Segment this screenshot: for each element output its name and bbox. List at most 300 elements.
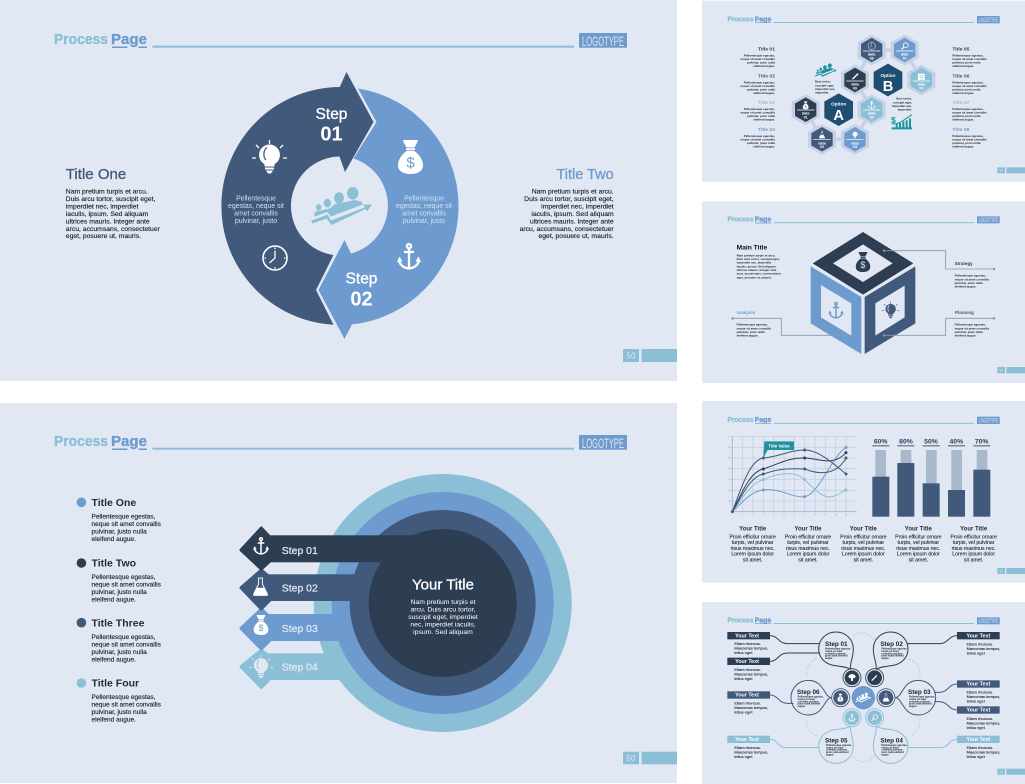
list: title two: Title Two xyxy=(92,558,136,570)
text column: titles 05 to 08: neque sit amet convallis xyxy=(952,84,987,88)
petal: step 01: justo nulla eleifend xyxy=(824,655,848,658)
list: title one: neque sit amet convallis xyxy=(92,521,162,528)
banner: right second: Your Text xyxy=(966,682,990,688)
logotype box: LOGOTYPE xyxy=(979,418,998,425)
panel: charts slide xyxy=(702,401,1025,583)
bar: 70%: 70% xyxy=(975,438,988,445)
list: title three: Title Three xyxy=(92,617,145,629)
petal: step 02 xyxy=(873,632,908,669)
text block: planning: pulvinar, justo nulla xyxy=(955,330,983,334)
list: title four xyxy=(77,678,162,724)
text block: title one: Title One xyxy=(66,166,126,183)
banner: left third: Maecenas tempus, xyxy=(734,705,768,710)
text column: titles 01 to 04: eleifend augue. xyxy=(753,144,775,148)
bar: 60%: 60% xyxy=(874,438,888,445)
text block: planning: eleifend augue. xyxy=(955,334,977,338)
heading: Process Page: Process xyxy=(727,617,753,624)
text column: titles 05 to 08: pulvinar, justo nulla xyxy=(952,61,981,65)
text: your title xyxy=(408,576,478,636)
banner: right bottom: tellus eget xyxy=(967,754,986,759)
panel: six-step petal slide xyxy=(702,602,1025,784)
text column 1: Lorem ipsum dolor xyxy=(731,552,774,558)
petal: step 01: augue. xyxy=(825,657,833,660)
text block: title one: iaculis, ipsum. Sed aliquam xyxy=(66,211,148,218)
callout: title value: Title Value xyxy=(768,443,790,448)
icon: clock xyxy=(263,246,287,270)
text column: titles 01 to 04: Title 02 xyxy=(758,74,775,80)
list: title two: Pellentesque egestas, xyxy=(92,574,155,581)
logotype box xyxy=(579,33,627,49)
list: title two: neque sit amet convallis xyxy=(92,582,162,588)
text column 2: sit amet. xyxy=(798,557,818,563)
label: step 01 xyxy=(316,106,347,146)
axis labels: 3 xyxy=(729,479,731,481)
banner: right bottom: Maecenas tempus, xyxy=(967,749,1000,754)
label: step 02: Step xyxy=(346,270,377,288)
text column 5: Lorem ipsum dolor xyxy=(952,552,995,558)
banner: left top: tellus eget xyxy=(734,650,753,655)
banner: right third: Etiam rhoncus. xyxy=(967,716,993,721)
text column: titles 05 to 08: pulvinar, justo nulla xyxy=(952,141,981,145)
node: data 08 xyxy=(858,35,886,65)
text column 4: sit amet. xyxy=(909,557,928,563)
label: step 01: 01 xyxy=(320,124,343,146)
series: slate top xyxy=(731,448,847,513)
list: title four: Pellentesque egestas, xyxy=(92,694,155,701)
list: title one xyxy=(77,497,162,543)
heading: Process Page: Process xyxy=(727,16,753,23)
node: data 07 xyxy=(891,35,919,65)
node: data 02 xyxy=(808,124,836,155)
text column: titles 01 to 04: Pellentesque egestas, xyxy=(744,81,775,85)
logotype box: LOGOTYPE xyxy=(582,435,624,451)
text column 4 xyxy=(895,526,942,563)
petal: step 04: Pellentesque egestas, xyxy=(881,744,907,747)
node: option A xyxy=(824,93,853,126)
petal: step 04: augue. xyxy=(881,753,890,756)
text: your title: ipsum. Sed aliquam xyxy=(413,629,473,636)
axis labels: 7 xyxy=(804,514,806,516)
text column: titles 01 to 04: Pellentesque egestas, xyxy=(744,134,775,138)
banner: right second: tellus eget xyxy=(967,698,986,703)
text block: title two: iaculis, ipsum. Sed aliquam xyxy=(531,211,614,218)
axis labels: 8 xyxy=(814,514,816,516)
text: left segment copy: Pellentesque xyxy=(236,196,276,202)
text: left hexagon note: imperdiet nec, xyxy=(815,87,835,91)
text column 2: turpis, vel pulvinar xyxy=(787,540,829,546)
banner: left bottom: Maecenas tempus, xyxy=(734,749,768,754)
banner: right top: tellus eget xyxy=(967,651,986,656)
text column: titles 01 to 04: eleifend augue. xyxy=(753,64,775,68)
petal: step 05: augue. xyxy=(826,753,834,756)
text: your title: Your Title xyxy=(412,576,474,594)
axis labels: 3 xyxy=(763,514,765,516)
text block: title one: eget, posuere ut, mauris. xyxy=(66,233,141,240)
text block: main title: arcu, accumsans, consectetuer xyxy=(737,272,782,276)
tab: step 02: Step 02 xyxy=(282,584,318,594)
text column: titles 01 to 04: neque sit amet convallis xyxy=(740,137,775,141)
text block: title two: eget, posuere ut, mauris. xyxy=(539,233,614,240)
banner: left bottom xyxy=(727,736,770,759)
petal: step 05: Step 05 xyxy=(825,738,848,745)
text block: analysis xyxy=(737,310,772,338)
text block: planning: Pellentesque egestas, xyxy=(955,323,986,327)
banner: right top xyxy=(957,632,1000,656)
text block: title two: Nam pretium turpis et arcu. xyxy=(532,188,614,196)
text column: titles 05 to 08: Pellentesque egestas, xyxy=(952,107,984,111)
petal: step 02: Pellentesque egestas, xyxy=(881,648,907,651)
line chart xyxy=(728,437,857,516)
logotype box: LOGOTYPE xyxy=(979,618,998,625)
node: data 02: 02 xyxy=(820,145,824,149)
label: step 02: 02 xyxy=(350,288,373,310)
list: title three: Pellentesque egestas, xyxy=(92,634,155,641)
text block: analysis: eleifend augue. xyxy=(737,334,759,338)
heading: Process Page xyxy=(727,417,771,424)
node: option B: Option xyxy=(880,73,896,78)
axis labels: 10 xyxy=(834,514,838,516)
text column: titles 05 to 08: Title 07 xyxy=(952,100,970,106)
text column 3: sit amet. xyxy=(854,557,873,563)
text column 5: Your Title xyxy=(960,526,988,532)
text block: title two: Title Two xyxy=(556,167,614,183)
text block: analysis: Analysis xyxy=(737,310,756,315)
text: left hexagon note: imperdiet. xyxy=(815,91,829,95)
petal: step 04 xyxy=(873,726,908,763)
hub icon: step 04 xyxy=(866,709,884,727)
list: title one: pulvinar, justo nulla xyxy=(92,528,147,536)
text block: main title: eget, posuere ut, mauris. xyxy=(737,275,772,279)
banner: right third: tellus eget xyxy=(967,725,986,730)
text column 5: Proin efficitur ornare xyxy=(950,534,997,540)
ring: blue xyxy=(332,492,554,714)
logotype box: LOGOTYPE xyxy=(979,17,998,24)
list: title one: Pellentesque egestas, xyxy=(92,514,155,520)
list: title two: pulvinar, justo nulla xyxy=(92,589,147,596)
text column 1: Proin efficitur ornare xyxy=(729,534,776,540)
banner: right second xyxy=(957,680,1000,703)
page number: 50 xyxy=(999,368,1003,372)
text block: main title xyxy=(737,245,782,279)
text block: title two: ultrices mauris. Integer ante xyxy=(530,218,614,225)
hub icon: step 05 xyxy=(843,709,861,727)
connector lines xyxy=(770,636,957,748)
text: right segment copy: pulvinar, justo xyxy=(403,218,445,225)
banner: left second: Your Text xyxy=(735,659,759,665)
text column: titles 05 to 08: Title 05 xyxy=(952,47,970,53)
banner: left top: Etiam rhoncus. xyxy=(734,641,761,646)
icon: teal growth chart xyxy=(891,115,912,128)
list: title three xyxy=(77,617,162,663)
text block: strategy: neque sit amet convallis xyxy=(955,277,990,281)
text column: titles 01 to 04: neque sit amet convallis xyxy=(740,57,775,61)
node: data 09: 09 xyxy=(853,86,857,90)
axis labels: 4 xyxy=(773,514,775,516)
text column 3 xyxy=(840,526,887,563)
text: right hexagon note: imperdiet nec, xyxy=(892,104,912,108)
text column 2: risus maximus nec. xyxy=(786,546,830,552)
text block: main title: Nam pretium turpis et arcu. xyxy=(737,253,775,257)
banner: left third: Etiam rhoncus. xyxy=(734,701,761,706)
node: data 01: data xyxy=(802,112,809,116)
cube diagram xyxy=(811,232,915,354)
heading: Process Page xyxy=(727,617,771,624)
text column: titles 01 to 04: pulvinar, justo nulla xyxy=(747,141,775,145)
node: data 04: data xyxy=(868,112,875,116)
node: data 07: 07 xyxy=(903,56,907,60)
petal: step 05: Pellentesque egestas, xyxy=(826,744,852,747)
text column: titles 01 to 04 xyxy=(740,47,775,148)
list: title one: eleifend augue. xyxy=(92,536,136,543)
text block: strategy: Strategy xyxy=(955,261,973,266)
text column 4: turpis, vel pulvinar xyxy=(898,540,939,546)
text column: titles 05 to 08: neque sit amet convallis xyxy=(952,57,987,61)
axis labels: 4 xyxy=(729,469,731,471)
text: left hexagon note: suscipit eget, xyxy=(815,83,834,87)
axis labels: 6 xyxy=(729,447,731,449)
text column 1: sit amet. xyxy=(743,557,762,563)
text column: titles 01 to 04: neque sit amet convallis xyxy=(740,110,775,114)
axis labels: 6 xyxy=(794,514,796,516)
text: right hexagon note: suscipit eget, xyxy=(893,100,912,104)
banner: right top: Etiam rhoncus. xyxy=(967,642,993,647)
icon: money bag xyxy=(398,140,423,174)
text block: analysis: neque sit amet convallis xyxy=(737,326,772,330)
petal: step 06: Pellentesque egestas, xyxy=(798,696,824,699)
list: title four: neque sit amet convallis xyxy=(92,702,162,708)
axis labels: 5 xyxy=(783,514,785,516)
petal: step 01: neque sit amet xyxy=(825,650,843,653)
text: your title: nec, imperdiet iaculis, xyxy=(410,622,476,628)
tab: step 04: Step 04 xyxy=(282,662,318,674)
petal: step 04: convallis pulvinar, xyxy=(881,749,903,752)
text: right segment copy: egestas, neque sit xyxy=(396,203,452,210)
petal: step 03 xyxy=(895,680,936,715)
list: title four: pulvinar, justo nulla xyxy=(92,709,147,716)
petal: step 02: Step 02 xyxy=(880,641,903,648)
hub icon: step 06 xyxy=(832,689,850,707)
heading: Process Page: Page xyxy=(755,417,771,424)
page number xyxy=(623,349,677,362)
text column 1: Your Title xyxy=(739,526,767,532)
heading: Process Page xyxy=(54,31,147,48)
heading: Process Page: Process xyxy=(54,433,108,450)
page number xyxy=(997,568,1025,574)
petal: step 06: Step 06 xyxy=(797,689,820,696)
page number xyxy=(997,769,1025,775)
label: step 01: Step xyxy=(316,106,347,123)
banner: right third xyxy=(957,706,1000,730)
text block: main title: Duis arcu tortor, suscipit eget, xyxy=(737,257,780,261)
text column 2: Proin efficitur ornare xyxy=(785,534,831,540)
banner: left bottom: Your Text xyxy=(735,737,759,743)
logotype box xyxy=(977,16,1000,24)
node: data 04 xyxy=(858,94,886,125)
text column 2 xyxy=(785,526,831,563)
heading: Process Page: Page xyxy=(755,617,771,624)
petal: step 06: augue. xyxy=(798,705,806,708)
text column: titles 01 to 04: Title 01 xyxy=(758,47,775,53)
node: data 09 xyxy=(841,65,869,95)
series: slate lower xyxy=(732,456,847,512)
text block: analysis: pulvinar, justo nulla xyxy=(737,330,765,334)
text column: titles 05 to 08: pulvinar, justo nulla xyxy=(952,114,981,118)
petal: step 03: justo nulla eleifend xyxy=(908,703,932,706)
text column 4: risus maximus nec. xyxy=(896,546,940,552)
text block: main title: ultrices mauris. Integer ante xyxy=(737,268,777,272)
text column: titles 01 to 04: neque sit amet convallis xyxy=(740,84,775,88)
panel: two-step cycle slide xyxy=(0,0,677,381)
icon: teal growth chart: $ xyxy=(891,115,896,125)
page number xyxy=(997,367,1025,373)
page number: 50 xyxy=(627,754,636,763)
banner: right bottom xyxy=(957,736,1000,759)
page number xyxy=(623,752,677,764)
axis labels: 5 xyxy=(729,458,731,460)
icon: teal team xyxy=(815,63,837,77)
heading: Process Page: Page xyxy=(111,433,147,450)
series: light xyxy=(732,474,847,512)
hub icon: step 02 xyxy=(866,669,884,687)
text block: main title: imperdiet nec, imperdiet xyxy=(737,261,771,265)
text block: strategy: eleifend augue. xyxy=(955,285,977,289)
text block: strategy: Pellentesque egestas, xyxy=(955,274,986,278)
petal: step 06 xyxy=(791,680,832,715)
text: right segment copy: Pellentesque xyxy=(404,196,444,202)
node: option B xyxy=(874,64,902,96)
text column 4: Your Title xyxy=(905,526,933,532)
petal: step 03: convallis pulvinar, xyxy=(909,700,931,703)
icon: anchor xyxy=(397,244,421,268)
page number: 50 xyxy=(999,569,1003,573)
banner: left third: Your Text xyxy=(735,693,759,699)
text column 2: Lorem ipsum dolor xyxy=(787,552,830,558)
cube left face xyxy=(811,266,861,354)
label: step 02 xyxy=(346,270,377,310)
icon: team with arrow xyxy=(311,187,372,225)
text column 3: Lorem ipsum dolor xyxy=(842,552,885,558)
text: left hexagon note: Duis tortor, xyxy=(815,80,831,84)
banner: left third: tellus eget xyxy=(734,710,753,715)
text block: title one: Duis arcu tortor, suscipit eget, xyxy=(66,196,155,203)
text column: titles 05 to 08: Title 08 xyxy=(952,127,970,133)
cycle diagram xyxy=(221,72,459,339)
list: title one: Title One xyxy=(92,497,136,509)
text: your title: suscipit eget, imperdiet xyxy=(408,614,478,621)
text block: title one xyxy=(66,166,161,240)
text: right hexagon note: imperdiet. xyxy=(898,108,912,112)
banner: left third xyxy=(727,691,770,715)
petal: step 03: Step 03 xyxy=(908,689,931,696)
logotype box xyxy=(977,617,1000,625)
logotype box xyxy=(977,417,1000,425)
text column: titles 01 to 04: eleifend augue. xyxy=(753,91,775,95)
heading: Process Page: Process xyxy=(727,217,753,224)
list: title three: eleifend augue. xyxy=(92,656,136,663)
node: option A: A xyxy=(833,108,844,124)
petal: step 01 xyxy=(819,632,853,669)
heading: Process Page xyxy=(727,217,771,224)
banner: left second: Etiam rhoncus. xyxy=(734,667,761,672)
banner: right third: Maecenas tempus, xyxy=(967,720,1000,725)
list: title four: eleifend augue. xyxy=(92,716,136,724)
text column: titles 01 to 04: pulvinar, justo nulla xyxy=(747,61,775,65)
tab: step 04 xyxy=(241,650,355,688)
heading: Process Page: Page xyxy=(755,217,771,224)
banner: left bottom: Etiam rhoncus. xyxy=(734,745,761,750)
cube top face xyxy=(813,232,913,295)
page number: 50 xyxy=(627,352,636,360)
text column 1 xyxy=(729,526,776,563)
text block: main title: iaculis, ipsum. Sed aliquam xyxy=(737,264,776,268)
node: option A: Option xyxy=(831,102,846,107)
panel: concentric rings slide xyxy=(0,403,677,783)
text column: titles 05 to 08: neque sit amet convallis xyxy=(952,137,987,141)
banner: left second: Maecenas tempus, xyxy=(734,671,768,676)
banner: right third: Your Text xyxy=(966,708,990,714)
icon: light bulb xyxy=(252,140,287,174)
chart: concentric rings with step tabs xyxy=(241,474,572,732)
petal: step 01: Pellentesque egestas, xyxy=(825,648,851,651)
heading: Process Page: Process xyxy=(54,31,108,48)
banner: left second xyxy=(727,658,770,681)
text column: titles 05 to 08: eleifend augue. xyxy=(952,91,974,95)
banner: left second: tellus eget xyxy=(734,676,753,681)
text: right hexagon note: Duis tortor, xyxy=(896,97,912,101)
logotype box: LOGOTYPE xyxy=(979,217,998,224)
banner: right bottom: Etiam rhoncus. xyxy=(967,745,993,750)
logotype box: LOGOTYPE xyxy=(582,33,624,49)
text block: strategy xyxy=(955,261,990,289)
panel: hexagon options slide xyxy=(702,1,1025,182)
text: left segment copy: pulvinar, justo xyxy=(235,218,277,225)
text column 3: turpis, vel pulvinar xyxy=(843,540,884,546)
node: data 02: data xyxy=(818,141,826,145)
node: data 03: 03 xyxy=(853,145,857,149)
text block: main title: Main Title xyxy=(737,245,768,252)
tab: step 01: Step 01 xyxy=(282,546,318,557)
node: data 06: 06 xyxy=(919,86,923,90)
text block: analysis: Pellentesque egestas, xyxy=(737,323,768,327)
text block: title two: arcu, accumsans, consectetuer xyxy=(520,226,614,233)
node: data 06: data xyxy=(918,83,925,87)
ring: outer light xyxy=(314,474,572,732)
axis labels: 1 xyxy=(729,501,731,503)
dashed flow arrows xyxy=(806,633,920,762)
text column 3: risus maximus nec. xyxy=(841,546,885,552)
list: title two: eleifend augue. xyxy=(92,596,136,604)
tab: step 01 xyxy=(241,528,415,569)
node: option B: B xyxy=(883,79,893,95)
text column 2: Your Title xyxy=(794,526,822,532)
logotype box xyxy=(977,216,1000,224)
banner: left top xyxy=(727,632,770,655)
text column 4: Proin efficitur ornare xyxy=(895,534,942,540)
text column: titles 05 to 08: Pellentesque egestas, xyxy=(952,134,984,138)
heading: Process Page xyxy=(727,16,771,23)
text block: title two xyxy=(520,167,614,240)
axis labels: 2 xyxy=(752,514,754,516)
bar chart xyxy=(872,438,990,517)
text block: title one: arcu, accumsans, consectetuer xyxy=(66,226,161,233)
banner: right top: Your Text xyxy=(966,633,990,639)
series: blue xyxy=(732,446,847,512)
text: left segment copy: amet convallis xyxy=(234,210,278,218)
text block: title one: imperdiet nec, imperdiet xyxy=(66,203,138,210)
heading: Process Page: Page xyxy=(111,31,147,48)
petal: step 03: neque sit amet xyxy=(909,698,927,701)
text column: titles 01 to 04: pulvinar, justo nulla xyxy=(747,114,775,118)
